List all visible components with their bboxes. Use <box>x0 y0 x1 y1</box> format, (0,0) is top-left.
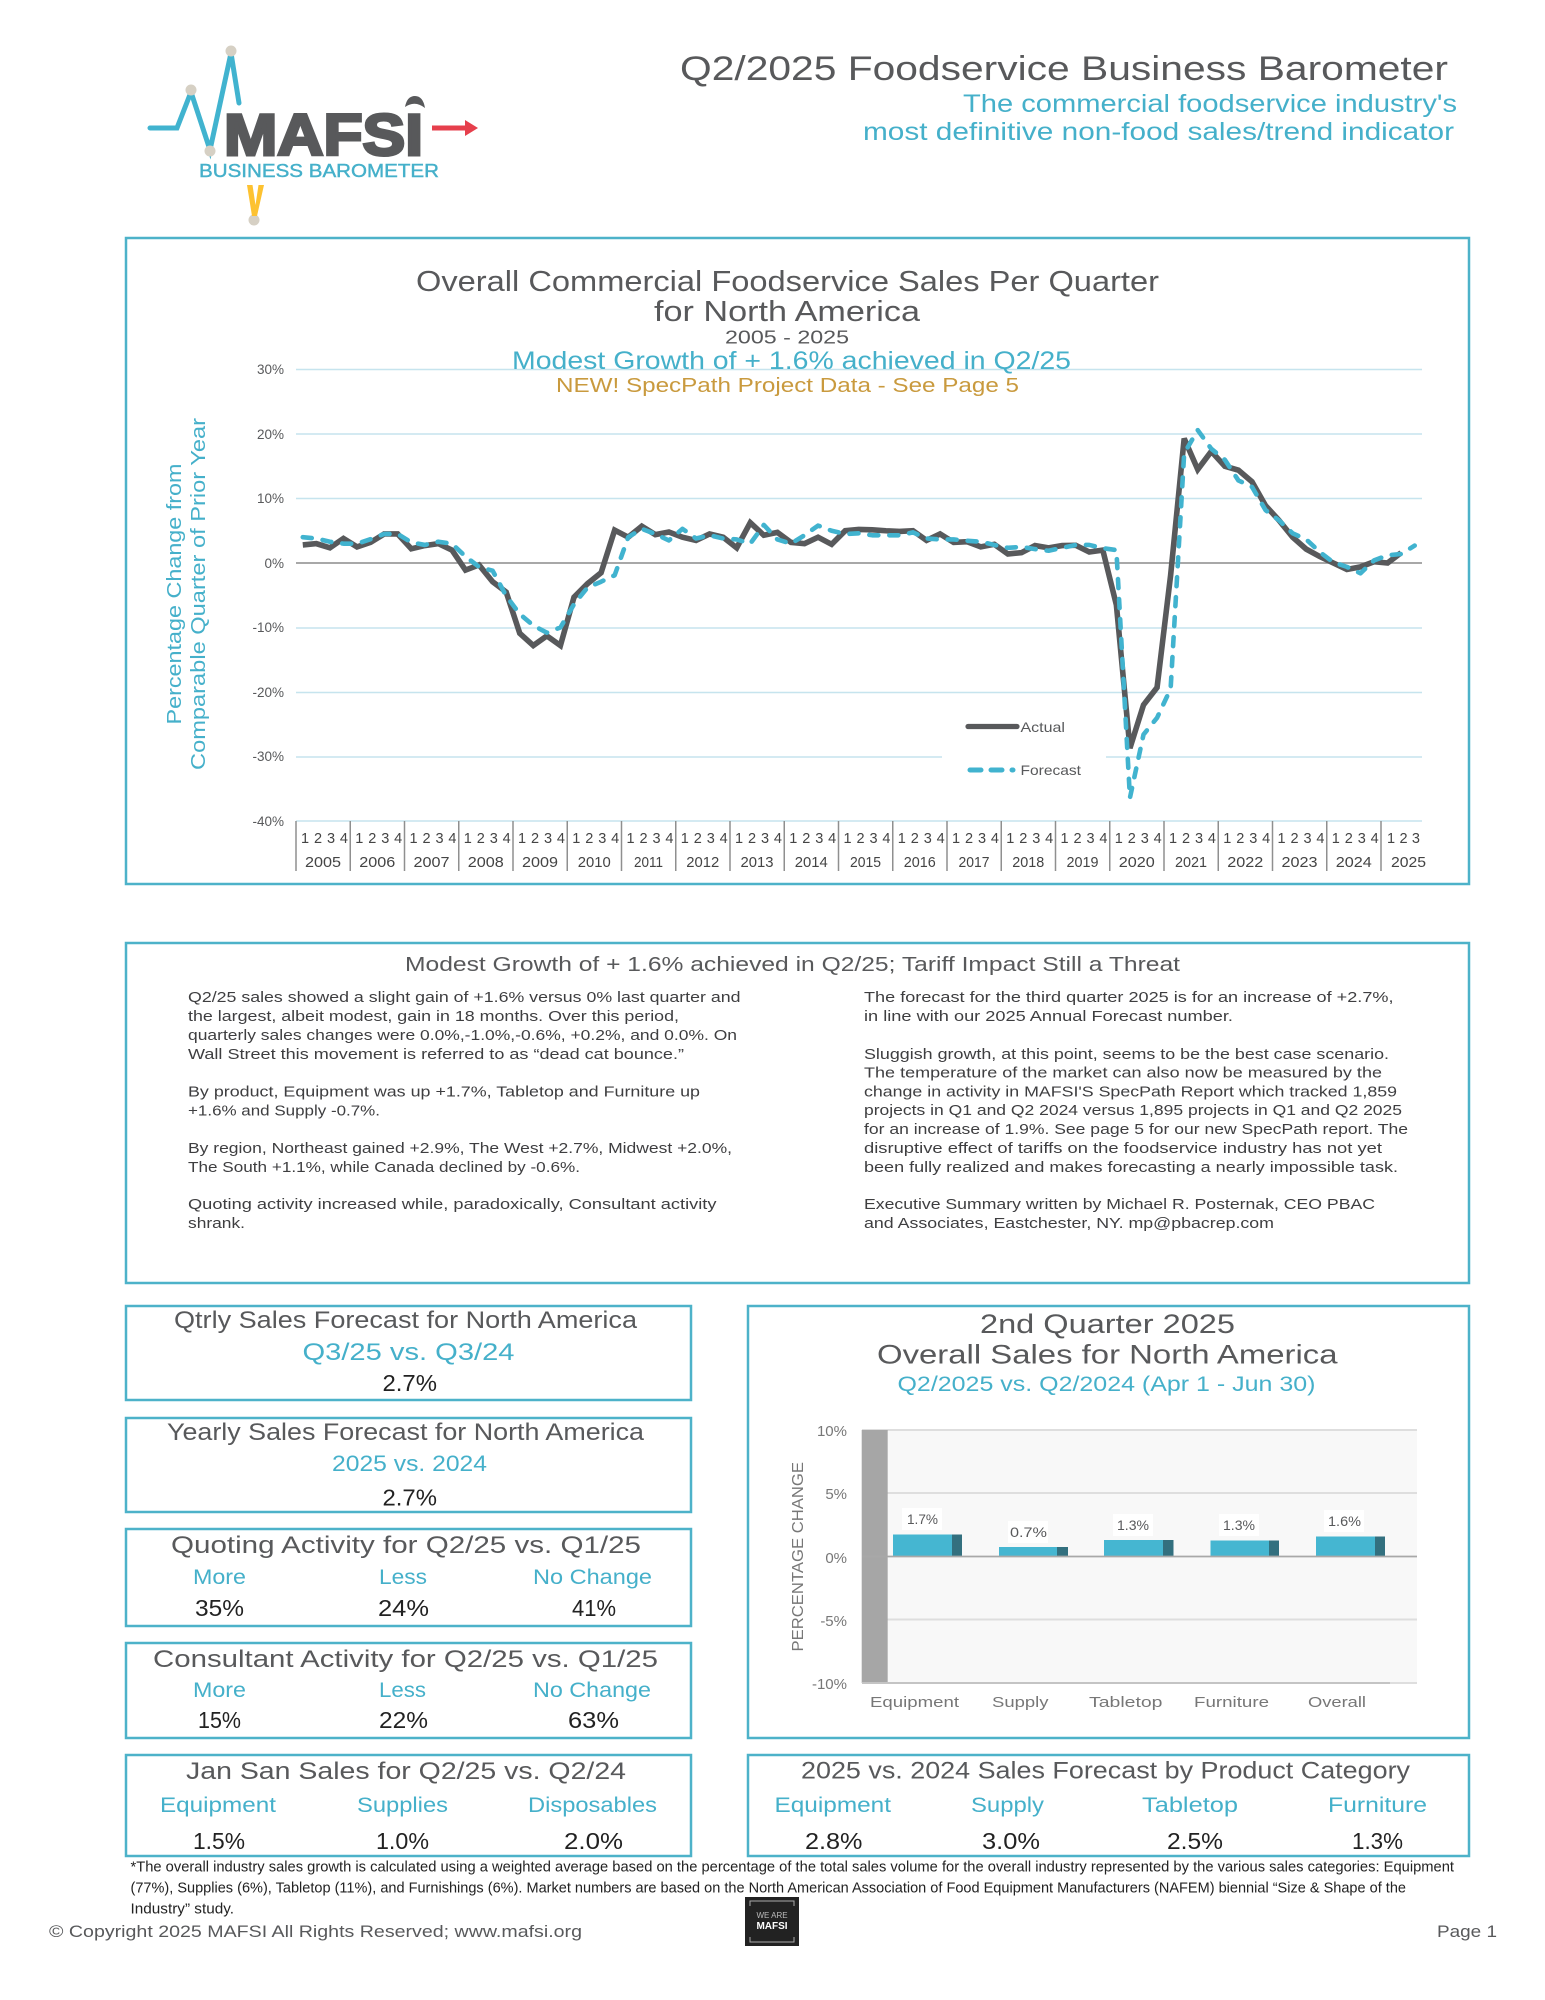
panel: jan san sales: Disposables <box>528 1794 657 1817</box>
panel: jan san sales: Supplies <box>357 1794 448 1817</box>
subtitle: most definitive non-food sales/trend indicator <box>863 118 1454 146</box>
title: Q2/2025 Foodservice Business Barometer <box>680 50 1448 88</box>
x axis quarter labels: 1 2 3 4 <box>735 831 782 847</box>
y axis labels: 30% <box>257 362 284 377</box>
summary left column: Wall Street this movement is referred to as “dead cat bounce.” <box>188 1047 684 1063</box>
logo tagline: BUSINESS BAROMETER <box>199 161 439 181</box>
footnote: (77%), Supplies (6%), Tabletop (11%), and Furnishings (6%). Market numbers are based on the North American Association of Food Equipment Manufacturers (NAFEM) biennial “Size & Shape of the <box>130 1880 1406 1896</box>
y axis labels: 20% <box>257 427 284 442</box>
bar x axis labels: Equipment <box>870 1694 960 1711</box>
panel: jan san sales: 1.5% <box>193 1828 245 1854</box>
x axis quarter labels: 1 2 3 4 <box>1115 831 1162 847</box>
x axis year labels: 2012 <box>686 854 719 871</box>
summary right column: Sluggish growth, at this point, seems to be the best case scenario. <box>864 1047 1389 1063</box>
x axis quarter labels: 1 2 3 4 <box>898 831 945 847</box>
icon: pulse dots <box>186 46 260 226</box>
summary left column: shrank. <box>188 1216 245 1232</box>
x axis year labels: 2008 <box>468 854 504 871</box>
footnote <box>130 1860 1454 1918</box>
panel: sales forecast by product category: 2.8% <box>805 1828 862 1854</box>
subtitle: The commercial foodservice industry's <box>963 90 1457 118</box>
x axis quarter labels: 1 2 3 4 <box>355 831 402 847</box>
panel: quarterly sales forecast: Qtrly Sales Forecast for North America <box>174 1307 638 1334</box>
bar x axis labels: Overall <box>1308 1694 1366 1711</box>
panel: yearly sales forecast: Yearly Sales Forecast for North America <box>167 1419 645 1446</box>
icon: red arrow <box>432 120 478 136</box>
bar y axis title: PERCENTAGE CHANGE <box>790 1462 807 1652</box>
summary heading: Modest Growth of + 1.6% achieved in Q2/25; Tariff Impact Still a Threat <box>405 953 1180 976</box>
summary right column: for an increase of 1.9%. See page 5 for our new SpecPath report. The <box>864 1122 1408 1138</box>
y axis labels: -40% <box>252 814 284 829</box>
bar value labels: 0.7% <box>1010 1524 1047 1540</box>
x axis year labels: 2013 <box>740 854 774 871</box>
panel: sales forecast by product category <box>748 1755 1469 1856</box>
panel: consultant activity: 15% <box>198 1707 241 1733</box>
x axis quarter labels: 1 2 3 4 <box>844 831 890 847</box>
panel: sales forecast by product category: 3.0% <box>982 1828 1040 1854</box>
y axis labels: 10% <box>257 491 284 506</box>
x axis quarter labels: 1 2 3 4 <box>1006 831 1053 847</box>
x axis quarter labels: 1 2 3 4 <box>952 831 999 847</box>
x axis year labels: 2020 <box>1119 854 1155 871</box>
x axis year labels: 2016 <box>904 854 936 871</box>
panel: quoting activity: Quoting Activity for Q2/25 vs. Q1/25 <box>171 1532 641 1559</box>
panel: consultant activity: 63% <box>568 1707 619 1733</box>
bar value labels: 1.3% <box>1223 1517 1255 1533</box>
x axis quarter labels <box>301 831 1420 847</box>
summary right column: and Associates, Eastchester, NY. mp@pbacrep.com <box>864 1216 1274 1232</box>
heading: report title <box>680 50 1457 146</box>
x axis year labels: 2018 <box>1012 854 1044 871</box>
bar y axis labels: -5% <box>820 1613 847 1630</box>
x axis quarter labels: 1 2 3 4 <box>626 831 674 847</box>
panel: consultant activity <box>126 1643 691 1738</box>
x axis quarter labels: 1 2 3 4 <box>464 831 511 847</box>
y axis labels: -20% <box>252 685 284 700</box>
x axis year labels: 2010 <box>578 854 611 871</box>
panel: quoting activity: No Change <box>533 1566 652 1589</box>
bar y axis labels: 10% <box>817 1423 847 1440</box>
x axis quarter labels: 1 2 3 4 <box>410 831 456 847</box>
bar y axis labels: 5% <box>825 1486 847 1503</box>
chart title block: 2005 - 2025 <box>725 328 849 348</box>
panel: yearly sales forecast: 2025 vs. 2024 <box>332 1451 487 1476</box>
panel: quarterly sales forecast: Q3/25 vs. Q3/24 <box>302 1339 514 1366</box>
summary left column: By region, Northeast gained +2.9%, The West +2.7%, Midwest +2.0%, <box>188 1141 732 1157</box>
x axis quarter labels: 1 2 3 4 <box>1278 831 1324 847</box>
summary right column: The temperature of the market can also now be measured by the <box>864 1066 1382 1082</box>
panel: consultant activity: More <box>193 1679 246 1702</box>
summary left column <box>188 990 740 1232</box>
summary left column: the largest, albeit modest, gain in 18 months. Over this period, <box>188 1009 679 1025</box>
x axis year labels: 2007 <box>414 854 450 871</box>
x axis year labels: 2005 <box>305 854 341 871</box>
panel: overall sales bar chart <box>748 1306 1469 1738</box>
y axis labels: 0% <box>264 556 284 571</box>
y axis title: Percentage Change from <box>164 464 186 724</box>
x axis year labels: 2017 <box>958 854 990 871</box>
x axis quarter labels: 1 2 3 <box>1387 831 1420 847</box>
panel: consultant activity: No Change <box>533 1679 651 1702</box>
y axis labels: -30% <box>252 749 284 764</box>
summary right column: been fully realized and makes forecasting a nearly impossible task. <box>864 1160 1398 1176</box>
footnote: *The overall industry sales growth is calculated using a weighted average based on the percentage of the total sales volume for the overall industry represented by the various sales categories: Equipment <box>130 1860 1454 1876</box>
bar chart title: 2nd Quarter 2025 <box>980 1309 1235 1339</box>
summary left column: The South +1.1%, while Canada declined by -0.6%. <box>188 1160 580 1176</box>
y axis labels: -10% <box>252 620 284 635</box>
plot background and grid <box>862 1430 1417 1683</box>
x axis year labels: 2024 <box>1336 854 1372 871</box>
bar value labels: 1.3% <box>1117 1517 1149 1533</box>
panel: jan san sales: 1.0% <box>376 1828 429 1854</box>
panel: yearly sales forecast <box>126 1418 691 1512</box>
logo: MAFSI Business Barometer <box>150 46 478 226</box>
x axis year labels: 2022 <box>1227 854 1263 871</box>
x axis year labels: 2006 <box>359 854 395 871</box>
panel: consultant activity: Less <box>379 1679 426 1702</box>
x axis quarter labels: 1 2 3 4 <box>1169 831 1216 847</box>
legend: Actual <box>1020 719 1065 735</box>
summary left column: quarterly sales changes were 0.0%,-1.0%,-0.6%, +0.2%, and 0.0%. On <box>188 1028 737 1044</box>
bar x axis labels: Supply <box>992 1694 1049 1711</box>
panel: quarterly sales forecast <box>126 1306 691 1400</box>
bar x axis labels: Tabletop <box>1089 1694 1162 1711</box>
summary right column: Executive Summary written by Michael R. Posternak, CEO PBAC <box>864 1197 1375 1213</box>
x axis year labels: 2015 <box>850 854 881 871</box>
chart title block: Overall Commercial Foodservice Sales Per Quarter <box>416 266 1159 298</box>
panel: quoting activity: 35% <box>195 1595 244 1621</box>
x axis ticks <box>296 821 1381 871</box>
panel: jan san sales: Jan San Sales for Q2/25 vs. Q2/24 <box>186 1758 626 1785</box>
subtitle <box>863 90 1457 146</box>
panel: sales forecast by product category: 2.5% <box>1167 1828 1223 1854</box>
panel: sales forecast by product category: Tabletop <box>1142 1794 1238 1817</box>
bar chart title <box>877 1309 1339 1396</box>
x axis quarter labels: 1 2 3 4 <box>301 831 348 847</box>
x axis quarter labels: 1 2 3 4 <box>1332 831 1379 847</box>
x axis year labels: 2014 <box>795 854 828 871</box>
panel: sales forecast by product category: Furniture <box>1328 1794 1427 1817</box>
copyright: © Copyright 2025 MAFSI All Rights Reserved; www.mafsi.org <box>49 1922 582 1941</box>
bar y axis labels: -10% <box>812 1676 847 1693</box>
x axis quarter labels: 1 2 3 4 <box>1223 831 1270 847</box>
grid lines <box>296 370 1422 821</box>
x axis year labels: 2019 <box>1066 854 1098 871</box>
x axis quarter labels: 1 2 3 4 <box>518 831 565 847</box>
summary right column: The forecast for the third quarter 2025 is for an increase of +2.7%, <box>864 990 1394 1006</box>
icon: we are MAFSI badge: WE ARE <box>756 1911 788 1920</box>
y axis labels <box>252 362 284 829</box>
panel: quoting activity: 24% <box>378 1595 429 1621</box>
x axis year labels <box>305 854 1426 871</box>
legend: Forecast <box>1020 762 1081 778</box>
bar chart title: Overall Sales for North America <box>877 1340 1339 1370</box>
chart title block: for North America <box>654 296 921 328</box>
summary left column: Q2/25 sales showed a slight gain of +1.6% versus 0% last quarter and <box>188 990 740 1006</box>
panel: yearly sales forecast: 2.7% <box>382 1484 437 1510</box>
panel: jan san sales <box>126 1755 691 1856</box>
bar chart title: Q2/2025 vs. Q2/2024 (Apr 1 - Jun 30) <box>898 1373 1316 1396</box>
bar value labels: 1.6% <box>1328 1513 1361 1529</box>
logo wordmark: MAFSI <box>224 103 423 168</box>
summary left column: +1.6% and Supply -0.7%. <box>188 1104 380 1120</box>
panel: sales forecast by product category: Supply <box>971 1794 1045 1817</box>
page number: Page 1 <box>1437 1922 1497 1941</box>
bar x axis labels: Furniture <box>1194 1694 1269 1711</box>
icon: i dot swoosh <box>405 96 425 108</box>
panel: overall sales line chart <box>126 238 1469 884</box>
icon: we are MAFSI badge <box>745 1897 799 1946</box>
panel: quoting activity: Less <box>379 1566 427 1589</box>
bar x axis labels <box>870 1694 1366 1711</box>
line: forecast <box>303 430 1415 798</box>
summary right column: disruptive effect of tariffs on the foodservice industry has not yet <box>864 1141 1382 1157</box>
x axis quarter labels: 1 2 3 4 <box>1060 831 1108 847</box>
panel: sales forecast by product category: 2025 vs. 2024 Sales Forecast by Product Category <box>801 1758 1410 1784</box>
icon: yellow pulse tip <box>247 185 264 216</box>
panel: jan san sales: Equipment <box>160 1794 276 1817</box>
legend <box>968 719 1081 778</box>
panel: consultant activity: Consultant Activity for Q2/25 vs. Q1/25 <box>153 1646 658 1673</box>
x axis year labels: 2021 <box>1175 854 1207 871</box>
x axis year labels: 2009 <box>522 854 558 871</box>
x axis year labels: 2023 <box>1282 854 1318 871</box>
x axis year labels: 2011 <box>634 854 663 871</box>
bar value labels <box>902 1508 1364 1543</box>
bar value labels: 1.7% <box>907 1511 938 1527</box>
summary right column: change in activity in MAFSI'S SpecPath Report which tracked 1,859 <box>864 1084 1397 1100</box>
panel: quoting activity <box>126 1529 691 1626</box>
icon: pulse line <box>150 53 239 150</box>
summary left column: By product, Equipment was up +1.7%, Tabletop and Furniture up <box>188 1084 700 1100</box>
footnote: Industry” study. <box>130 1902 234 1918</box>
x axis year labels: 2025 <box>1391 854 1426 871</box>
summary right column <box>864 990 1408 1232</box>
x axis quarter labels: 1 2 3 4 <box>789 831 836 847</box>
y axis title <box>164 418 210 770</box>
y axis title: Comparable Quarter of Prior Year <box>188 418 210 770</box>
chart title block <box>416 266 1159 348</box>
x axis quarter labels: 1 2 3 4 <box>572 831 619 847</box>
summary left column: Quoting activity increased while, paradoxically, Consultant activity <box>188 1197 717 1213</box>
panel: quarterly sales forecast: 2.7% <box>382 1370 437 1396</box>
summary right column: in line with our 2025 Annual Forecast number. <box>864 1009 1233 1025</box>
x axis quarter labels: 1 2 3 4 <box>681 831 728 847</box>
panel: executive summary <box>126 943 1469 1283</box>
panel: jan san sales: 2.0% <box>564 1828 623 1854</box>
panel: quoting activity: 41% <box>572 1595 616 1621</box>
panel: consultant activity: 22% <box>379 1707 428 1733</box>
panel: sales forecast by product category: Equipment <box>774 1794 891 1817</box>
chart headline: Modest Growth of + 1.6% achieved in Q2/25 <box>512 347 1071 375</box>
chart callout: NEW! SpecPath Project Data - See Page 5 <box>556 375 1019 397</box>
summary right column: projects in Q1 and Q2 2024 versus 1,895 projects in Q1 and Q2 2025 <box>864 1103 1402 1119</box>
icon: we are MAFSI badge: MAFSI <box>756 1921 788 1932</box>
bar y axis labels <box>812 1423 847 1693</box>
panel: sales forecast by product category: 1.3% <box>1352 1828 1403 1854</box>
bar y axis labels: 0% <box>825 1550 847 1567</box>
line: actual <box>303 439 1401 748</box>
bars <box>893 1534 1385 1556</box>
panel: quoting activity: More <box>193 1566 246 1589</box>
